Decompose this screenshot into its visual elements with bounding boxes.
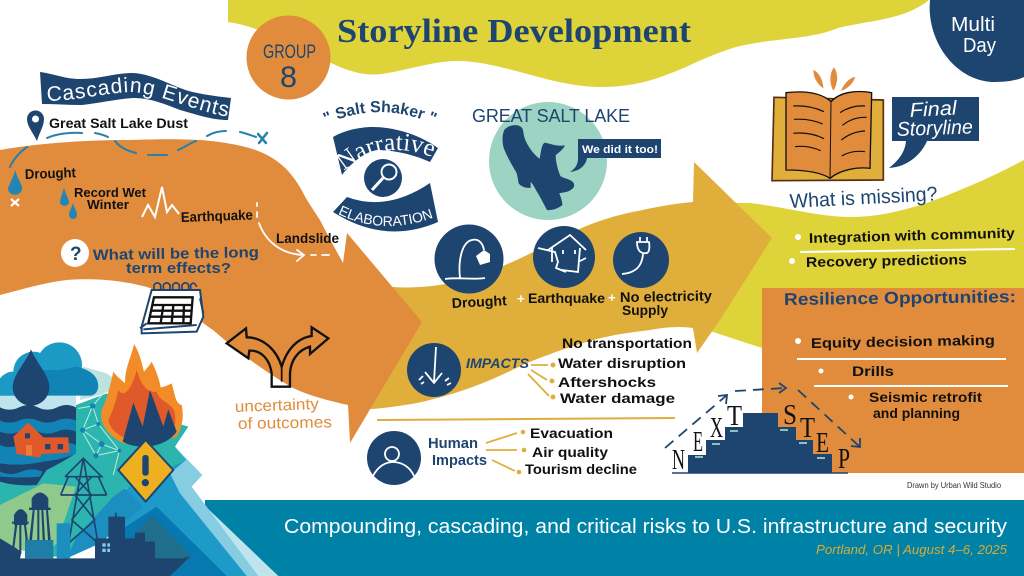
compound hazard labels: + — [608, 290, 616, 305]
long term effects question — [93, 244, 259, 277]
next step letters: E — [693, 426, 703, 458]
compound hazard labels: Supply — [622, 302, 668, 318]
multi day badge — [930, 0, 1024, 82]
impact list — [558, 335, 692, 406]
panel: resilience opportunities — [784, 287, 1016, 421]
house — [13, 423, 69, 458]
icon: magnifying glass — [364, 159, 402, 197]
warning sign — [118, 440, 173, 502]
compound hazard labels: Drought — [451, 292, 507, 311]
water drop — [13, 349, 49, 406]
lake silhouette — [503, 126, 574, 209]
footer headline: Compounding, cascading, and critical risks to U.S. infrastructure and security — [284, 516, 1007, 538]
long term effects question: term effects? — [126, 260, 231, 277]
icon: seismic wave — [142, 187, 179, 217]
final storyline bubble: Storyline — [896, 116, 973, 141]
right yellow band — [690, 160, 1024, 348]
human impacts heading: Human — [428, 435, 478, 452]
next step letters — [672, 399, 850, 476]
icon: question mark — [61, 239, 89, 267]
network lines — [78, 393, 121, 475]
compound hazard labels: No electricity — [620, 287, 712, 305]
long term effects question: What will be the long — [93, 244, 259, 264]
human impact list: Air quality — [532, 444, 608, 460]
drought label: Drought — [25, 164, 76, 182]
impact list: Water disruption — [558, 355, 686, 371]
gold arrow — [350, 162, 772, 409]
lake circle — [489, 102, 607, 220]
icon: calendar — [140, 283, 203, 333]
group badge — [246, 16, 330, 100]
final storyline bubble — [889, 97, 979, 168]
icon: question mark: ? — [70, 244, 82, 265]
resilience list: Seismic retrofit — [869, 389, 982, 405]
wildfire — [101, 344, 183, 447]
panel: human impacts — [367, 425, 637, 485]
human impacts heading: Impacts — [432, 452, 487, 469]
dashed stair arrows — [665, 383, 860, 448]
next step letters: X — [710, 412, 723, 444]
human impacts heading — [428, 435, 487, 469]
footer band — [205, 500, 1024, 576]
final storyline bubble: Final — [909, 98, 958, 122]
landslide label: Landslide — [276, 230, 339, 246]
uncertainty label: uncertainty — [235, 396, 319, 416]
missing list — [789, 225, 1015, 270]
human impact list: Tourism decline — [525, 461, 637, 477]
resilience list: Drills — [852, 363, 894, 379]
panel: cascading events — [8, 72, 339, 334]
panel: great salt lake — [472, 102, 661, 220]
next step staircase — [665, 383, 860, 476]
icon: drought drop — [8, 170, 22, 206]
panel: final storyline — [772, 67, 979, 181]
impact list: No transportation — [562, 335, 692, 351]
record wet winter label — [74, 186, 147, 212]
dashed route — [10, 131, 267, 167]
compound hazard labels: Earthquake — [528, 290, 605, 306]
next step letters: P — [838, 443, 850, 475]
impacts heading: IMPACTS — [466, 355, 530, 371]
flood water — [0, 395, 76, 485]
next step letters: S — [783, 399, 797, 431]
speech bubble: We did it too! — [582, 144, 658, 156]
impact list: Water damage — [560, 390, 675, 406]
multi day badge: Day — [963, 35, 996, 57]
missing heading: What is missing? — [789, 183, 938, 213]
cascading events banner: Cascading Events — [48, 77, 228, 116]
human impact list — [525, 425, 637, 477]
top yellow wave — [228, 0, 929, 87]
next step letters: T — [727, 400, 742, 432]
missing list: Recovery predictions — [806, 251, 967, 270]
multi day badge: Multi — [951, 14, 995, 36]
lake heading: GREAT SALT LAKE — [472, 106, 630, 126]
human impact connectors — [486, 430, 526, 474]
record wet winter label: Winter — [87, 198, 129, 212]
icon: person — [367, 431, 421, 485]
earthquake label: Earthquake — [181, 206, 253, 225]
icon: drooping flower — [434, 224, 504, 294]
uncertainty label: of outcomes — [238, 414, 332, 433]
narrative banner: Narrative — [337, 134, 434, 170]
location label: Great Salt Lake Dust — [49, 115, 188, 131]
icon: map pin — [27, 110, 44, 141]
icon: down arrow — [407, 343, 461, 397]
footer date: Portland, OR | August 4–6, 2025 — [816, 542, 1008, 557]
panel: what is missing — [789, 183, 1015, 270]
elaboration banner: ELABORATION — [338, 206, 432, 226]
icon: open book — [772, 67, 883, 181]
missing list: Integration with community — [809, 225, 1015, 246]
salt shaker heading: " Salt Shaker " — [322, 100, 438, 119]
group badge: GROUP — [263, 42, 316, 63]
next step letters: E — [816, 427, 829, 459]
credit: Drawn by Urban Wild Studio — [907, 481, 1002, 490]
resilience list: and planning — [873, 405, 960, 421]
impact list: Aftershocks — [558, 374, 656, 390]
illustration: hazards and infrastructure — [0, 342, 278, 576]
cloud — [0, 342, 98, 396]
icon: electric plug — [613, 232, 669, 288]
icon: rain drops — [60, 188, 77, 219]
next step letters: N — [672, 444, 685, 476]
human impact list: Evacuation — [530, 425, 613, 441]
speech bubble — [570, 139, 661, 172]
title: Storyline Development — [337, 13, 692, 50]
water towers — [12, 492, 51, 552]
next step letters: T — [800, 412, 815, 444]
panel: impacts — [407, 335, 692, 406]
compound hazard labels — [451, 287, 712, 318]
group badge: 8 — [280, 61, 297, 94]
pylon — [61, 458, 107, 558]
resilience list: Equity decision making — [811, 332, 995, 351]
orange arrow — [0, 139, 422, 443]
icon: diverging arrows — [227, 327, 328, 387]
stairs — [688, 413, 832, 473]
icon: cracked house — [533, 226, 595, 288]
impact connectors — [528, 362, 556, 400]
uncertainty label — [235, 396, 332, 433]
panel: salt shaker narrative — [322, 100, 438, 232]
arrow to landslide — [257, 203, 329, 261]
city skyline — [0, 513, 190, 576]
record wet winter label: Record Wet — [74, 186, 147, 200]
resilience heading: Resilience Opportunities: — [784, 287, 1016, 309]
resilience list — [795, 332, 1008, 421]
resilience opportunities panel background — [762, 288, 1024, 473]
compound hazard labels: + — [517, 291, 525, 306]
